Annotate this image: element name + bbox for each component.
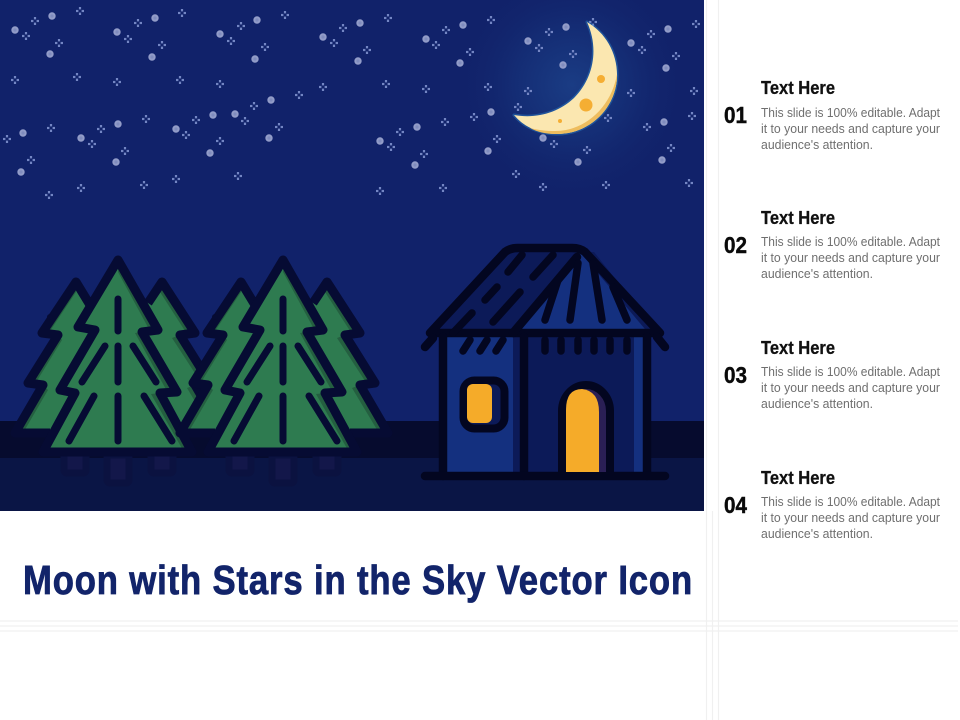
list item 04: 04 — [724, 492, 747, 518]
illustration panel: night sky scene — [0, 0, 704, 511]
icon: crescent moon — [514, 22, 617, 134]
list item 02: it to your needs and capture your — [761, 251, 940, 265]
dark horizon band — [0, 421, 704, 458]
hut window — [464, 380, 504, 428]
list item 03: it to your needs and capture your — [761, 381, 940, 395]
list item 04 — [724, 468, 941, 541]
list item 04: it to your needs and capture your — [761, 511, 940, 525]
list item 03: Text Here — [761, 338, 835, 358]
moon glow — [454, 0, 690, 203]
list item 02: Text Here — [761, 208, 835, 228]
list item 01: This slide is 100% editable. Adapt — [761, 106, 941, 120]
hut walls — [443, 337, 524, 476]
list item 04: This slide is 100% editable. Adapt — [761, 495, 941, 509]
list item 04: audience's attention. — [761, 527, 873, 541]
list item 01: it to your needs and capture your — [761, 122, 940, 136]
hut door — [562, 385, 610, 472]
list item 02: This slide is 100% editable. Adapt — [761, 235, 941, 249]
list item 02: audience's attention. — [761, 267, 873, 281]
list item 02: 02 — [724, 232, 747, 258]
list item 02 — [724, 208, 941, 281]
list item 01 — [724, 78, 941, 152]
icon: second pine tree group — [180, 260, 388, 483]
hut roof faces — [430, 250, 578, 335]
list item 03 — [724, 338, 941, 411]
foreground ground — [0, 458, 704, 511]
list item 03: audience's attention. — [761, 397, 873, 411]
title: Moon with Stars in the Sky Vector Icon — [23, 557, 693, 603]
list item 03: This slide is 100% editable. Adapt — [761, 365, 941, 379]
list item 03: 03 — [724, 362, 747, 388]
icon: hut — [425, 248, 665, 476]
list item 01: Text Here — [761, 78, 835, 98]
hut outline — [425, 248, 665, 476]
icon: first pine tree group — [15, 260, 223, 483]
list item 01: 01 — [724, 102, 747, 128]
list item 01: audience's attention. — [761, 138, 873, 152]
list item 04: Text Here — [761, 468, 835, 488]
stars — [3, 7, 700, 199]
